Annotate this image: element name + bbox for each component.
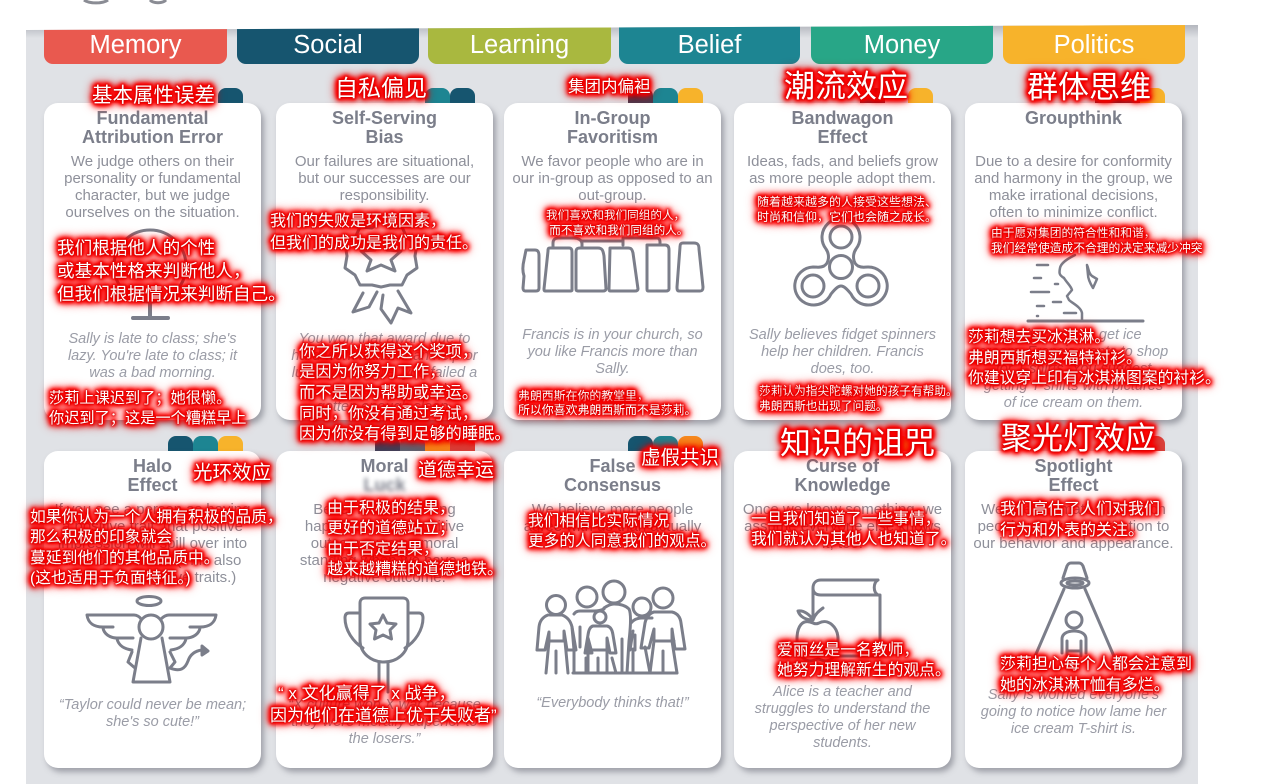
heading: Effect [127,474,178,494]
card: In-Group Favoritism [504,103,721,420]
label: in-group example: 所以你喜欢弗朗西斯而不是莎莉。 [518,403,696,417]
label: spotlight description [1000,499,1160,541]
description [300,500,469,586]
example: you like Francis more than [527,344,698,360]
example: Alice is a teacher and [773,684,912,700]
description: it, too. [822,534,863,552]
description: agree with us than actually [524,518,701,534]
tab: Belief: Belief [678,31,741,59]
description: We overestimate how much [981,500,1166,518]
heading: Moral [360,456,408,476]
card: Curse of Knowledge [734,451,951,768]
heading: Effect [817,126,868,146]
description: out-group. [578,186,647,204]
card: Bandwagon Effect [734,103,951,420]
example: help her children. Francis [761,344,924,360]
label: curse example: 她努力理解新生的观点。 [777,662,951,679]
label: halo title: 光环效应 [193,462,271,484]
description: We favor people who are in [521,152,704,170]
card: Self-Serving Bias [276,103,493,420]
heading [82,108,223,146]
example [749,327,936,377]
description: negative outcome. [323,568,446,586]
example: of ice cream on them. [1004,395,1143,411]
example: lazy. You're late to class; it [68,348,237,364]
icon: trophy [344,596,424,694]
description: outcome; worse moral [311,534,458,552]
tab: Learning [428,28,611,64]
label: moral luck example: 因为他们在道德上优于失败者” [270,706,497,725]
example: students. [813,734,872,750]
label: groupthink description: 我们经常使造成不合理的决定来减少冲突 [991,242,1202,254]
description [747,152,938,186]
description: ourselves on the situation. [65,204,240,220]
heading [332,108,437,146]
heading: Attribution Error [82,126,223,146]
description: people really pay attention to [978,518,1169,534]
description: as more people adopt them. [749,170,936,186]
label: self-serving example: 是因为你努力工作， [299,363,446,381]
card: Spotlight Effect [965,451,1182,768]
label: attribution example [49,389,246,429]
label: halo description [30,508,283,590]
label: attribution example: 莎莉上课迟到了；她很懒。 [49,390,231,407]
label: self-serving example: 你之所以获得这个奖项， [299,342,478,360]
example: “Taylor could never be mean; [59,696,246,712]
label: attribution example: 你迟到了；这是一个糟糕早上 [49,410,246,427]
label: bandwagon title: 潮流效应 [784,69,908,104]
icon: award ribbon [344,222,418,325]
label: halo description: 蔓延到他们的其他品质中。 [30,550,220,567]
description: personality or fundamental [64,170,241,186]
tab: Social: Social [293,31,363,59]
label: self-serving example [299,342,511,445]
label: attribution description: 或基本性格来判断他人， [57,261,251,281]
example [59,696,246,730]
tab: Memory: Memory [89,31,182,59]
description: their other traits. (This also [64,552,241,568]
description [295,152,474,204]
label: curse example [777,641,951,681]
card: Halo Effect [44,451,261,768]
label: halo description: (这也适用于负面特征。) [30,570,191,587]
description: a positive trait, that positive [62,518,243,534]
label: moral luck description: 更好的道德站立； [327,520,455,537]
heading: Curse of [806,456,879,476]
label: attribution description: 但我们根据情况来判断自己。 [57,284,286,304]
example [288,696,481,746]
label: self-serving example: 同时，你没有通过考试， [299,405,478,423]
example: You won that award due to [299,330,470,346]
description: impression will spill over into [58,534,247,552]
heading [127,456,178,494]
icon: angel and devil [86,595,218,684]
label: false consensus title: 虚假共识 [641,447,719,469]
example: gotten enough sleep. [317,398,452,414]
label: self-serving description [270,211,478,255]
heading [564,456,661,494]
card: False Consensus [504,451,721,768]
example: was a bad morning. [89,364,216,380]
example: cream. Francis wants to shop [979,344,1168,360]
label: curse of knowledge title: 知识的诅咒 [780,426,935,461]
logo remnant [83,0,167,4]
example: Francis is in your church, so [522,327,703,343]
label: moral luck title: 道德幸运 [418,460,494,481]
label: groupthink example: 莎莉想去买冰淇淋。 [968,329,1110,346]
example [979,327,1168,411]
tab: Money [811,26,993,64]
description: do. [602,534,623,552]
example: perspective of her new [770,718,915,734]
description: our behavior and appearance. [973,534,1174,552]
icon: group of people [536,580,686,674]
icon: book and apple [796,578,882,662]
label: spotlight example: 莎莉担心每个人都会注意到 [1000,656,1192,673]
description [64,152,241,220]
description: and harmony in the group, we [974,170,1173,186]
description [973,500,1174,552]
label: curse description: 一旦我们知道了一些事情， [751,511,941,528]
heading [567,108,658,146]
example: Sally. [595,361,630,377]
example: does, too. [811,361,874,377]
description: Due to a desire for conformity [975,152,1172,170]
icon: fidget spinner [793,217,889,306]
label: bandwagon description: 时尚和信仰，它们也会随之成长。 [757,210,937,224]
description [974,152,1173,220]
card: Fundamental Attribution Error [44,103,261,420]
label: in-group example [518,388,696,418]
label: self-serving example: 因为你没有得到足够的睡眠。 [299,425,511,443]
heading: Effect [1048,474,1098,494]
heading: Knowledge [794,474,890,494]
example [522,327,703,377]
example: getting T-shirts with pictures [984,378,1163,394]
example: struggles to understand the [755,700,930,716]
label: spotlight description: 行为和外表的关注。 [1000,522,1144,539]
card: Groupthink [965,103,1182,420]
label: moral luck example: “ x 文化赢得了 x 战争， [278,684,456,703]
icon: stonehenge [521,236,704,292]
label: groupthink example: 弗朗西斯想买福特衬衫。 [968,350,1142,366]
description: make irrational decisions, [989,186,1158,204]
category markers [168,88,1165,451]
heading: Favoritism [567,126,658,146]
heading: Consensus [564,474,661,494]
example [754,684,930,750]
tab: Memory [44,29,227,64]
card: Moral Luck [276,451,493,768]
label: self-serving description: 但我们的成功是我们的责任。 [270,235,478,252]
label: halo description: 如果你认为一个人拥有积极的品质， [30,509,283,526]
label: groupthink example: 你建议穿上印有冰淇淋图案的衬衫。 [968,370,1221,387]
description: often to minimize conflict. [989,204,1158,220]
label: bandwagon description [757,194,937,224]
example [68,330,238,380]
example [980,686,1167,736]
label: in-group description: 而不喜欢和我们同组的人。 [549,224,688,236]
label: groupthink description: 由于愿对集团的符合性和和谐， [991,226,1156,240]
description [524,500,702,552]
description: Our failures are situational, [295,152,474,170]
heading: Fundamental [96,108,208,128]
example: the losers.” [349,730,420,746]
description: works for negative traits.) [69,568,236,586]
heading: Bias [365,126,404,146]
example: they were morally superior to [291,714,478,730]
example: she's so cute!” [106,714,199,730]
description: If you see a person as having [55,500,250,518]
description: character, but we judge [75,186,230,204]
tab: Politics [1003,25,1185,64]
example: ice cream T-shirt is. [1011,720,1136,736]
example [291,330,478,414]
label: spotlight example [1000,654,1192,696]
heading: False [589,456,636,476]
icon: spotlight and person [1034,562,1115,658]
example: test because you hadn't [308,382,461,398]
label: in-group description [546,208,688,238]
description: happens after a positive [305,518,464,534]
description [55,500,250,586]
heading [1034,456,1112,494]
label: false consensus description: 我们相信比实际情况 [528,513,669,530]
label: in-group title: 集团内偏袒 [568,78,650,96]
label: curse description [751,510,956,550]
label: moral luck description: 由于积极的结果， [327,500,455,517]
label: bandwagon example: 莎莉认为指尖陀螺对她的孩子有帮助。 [759,384,958,398]
label: false consensus description [528,512,716,552]
heading: Spotlight [1034,456,1112,476]
heading: Self-Serving [332,108,437,128]
label: moral luck example [270,683,497,727]
label: curse description: 我们就认为其他人也知道了。 [751,531,956,548]
example: for T-shirts. You suggest [996,361,1151,377]
example: Sally believes fidget spinners [749,327,936,343]
label: moral luck description: 越来越糟糕的道德地铁。 [327,561,503,578]
label: spotlight title: 聚光灯效应 [1001,421,1156,456]
label: groupthink description [991,226,1202,256]
description: Better moral standing [313,500,456,518]
example: Sally is late to class; she's [68,330,236,346]
label: self-serving title: 自私偏见 [335,75,427,101]
heading: In-Group [574,108,650,128]
description: assume everyone else knows [744,518,941,534]
tab: Belief [619,26,800,64]
label: spotlight description: 我们高估了人们对我们 [1000,501,1160,518]
icon: mirror [112,228,188,320]
label: groupthink title: 群体思维 [1027,70,1151,105]
heading: Halo [133,456,172,476]
label: in-group description: 我们喜欢和我们同组的人， [546,208,685,222]
example: hard work rather than help or [291,348,478,364]
heading: Bandwagon [792,108,894,128]
description: We judge others on their [71,152,234,170]
description: Ideas, fads, and beliefs grow [747,152,938,170]
example: Sally is worried everyone's [988,686,1159,702]
tab: Politics: Politics [1054,31,1134,59]
label: moral luck description [327,499,503,580]
label: in-group example: 弗朗西斯在你的教堂里， [518,388,649,402]
heading [792,108,894,146]
label: halo description: 那么积极的印象就会 [30,529,172,546]
example: going to notice how lame her [981,704,1166,720]
heading: Groupthink [1025,108,1122,128]
label: self-serving example: 而不是因为帮助或幸运。 [299,384,478,402]
description [743,500,942,552]
description: our in-group as opposed to an [512,170,713,186]
description: responsibility. [340,186,429,204]
label: self-serving description: 我们的失败是环境因素， [270,213,446,230]
label: fundamental attribution title: 基本属性误差 [92,84,215,107]
label: bandwagon description: 随着越来越多的人接受这些想法、 [757,194,937,208]
heading [794,456,890,495]
label: false consensus description: 更多的人同意我们的观点。 [528,533,716,550]
label: bandwagon example: 弗朗西斯也出现了问题。 [759,400,888,412]
label: bandwagon example [759,384,958,414]
description: but our successes are our [298,170,471,186]
icon: head with thoughts [1026,254,1144,322]
description: standing when we have a [300,552,469,568]
label: attribution description [57,237,286,306]
label: curse example: 爱丽丝是一名教师， [777,642,919,659]
description: Once we know something, we [743,500,942,518]
label: moral luck description: 由于否定结果， [327,541,439,558]
example: “X culture won X war because [288,696,481,712]
tab: Learning: Learning [470,31,569,59]
label: groupthink example [968,328,1221,390]
description [512,152,713,204]
tab: Money: Money [864,31,940,59]
example: luck. Meanwhile, you failed a [292,364,477,380]
label: spotlight example: 她的冰淇淋T恤有多烂。 [1000,677,1170,694]
heading: Luck [363,474,406,494]
label: attribution description: 我们根据他人的个性 [57,238,215,258]
tab: Social [237,28,419,64]
heading [360,456,408,494]
description: We believe more people [532,500,693,518]
example: “Everybody thinks that!” [536,694,689,710]
example: Sally wants to get ice [1005,327,1142,343]
